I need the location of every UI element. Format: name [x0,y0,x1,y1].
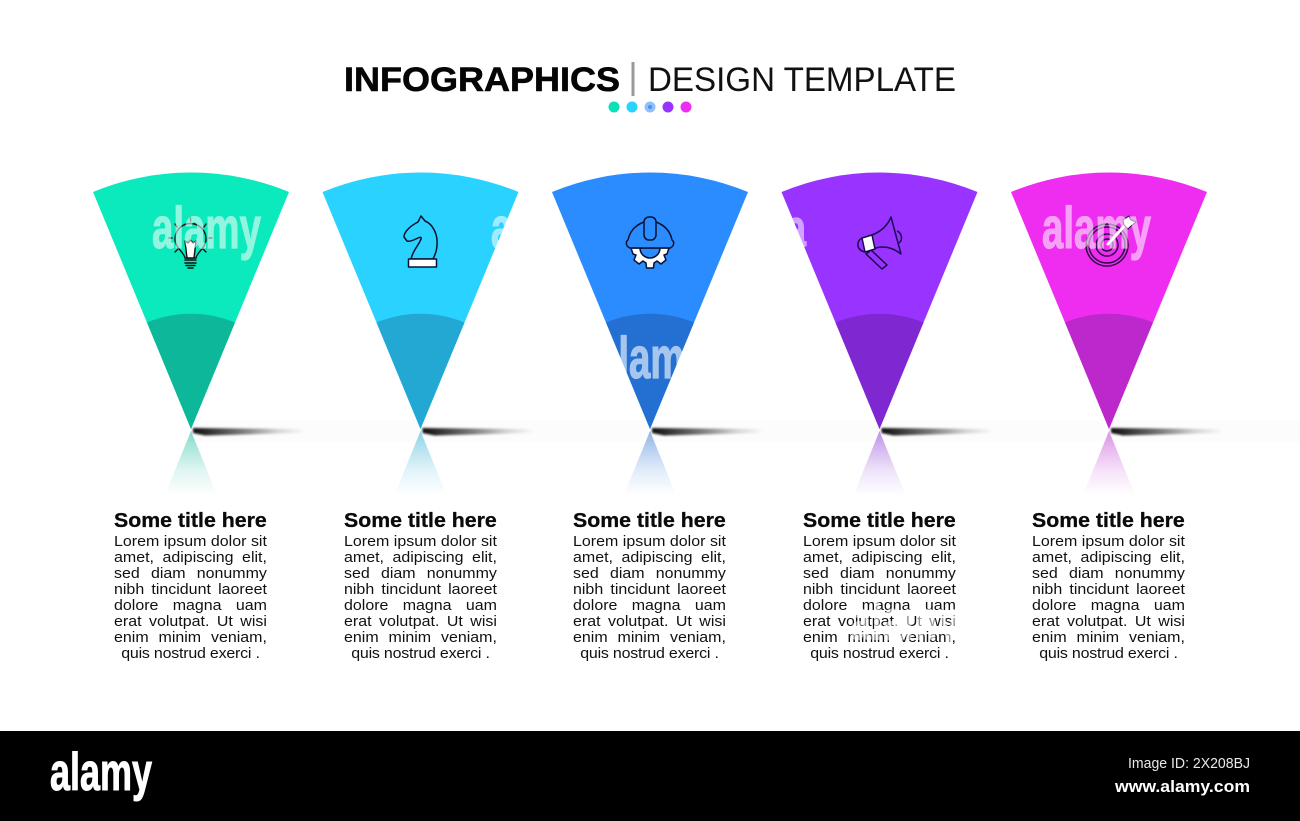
text block: step 4 [802,510,956,662]
text block: step 3: dolore magna uam [573,597,726,614]
watermark: alamy on first cone: alamy [152,196,261,261]
footer logo: alamy [50,743,152,802]
text block: step 2 [344,510,497,662]
text block: step 2: sed diam nonummy [344,565,496,582]
text block: step 1: dolore magna uam [114,597,267,614]
icon: hard hat with gear [626,217,674,268]
text block: step 4: amet, adipiscing elit, [802,549,955,566]
text block: step 2: Lorem ipsum dolor sit [344,533,496,550]
icon: chess knight [404,216,437,267]
text block: step 5: quis nostrud exerci . [1039,645,1178,662]
text block: step 1: amet, adipiscing elit, [114,549,267,566]
text block: step 5: nibh tincidunt laoreet [1032,581,1185,598]
title [344,61,956,99]
text block: step 4: dolore magna uam [802,597,955,614]
text block: step 2: quis nostrud exerci . [351,645,489,662]
icon: light bulb [169,218,212,268]
text block: step 1 [114,510,267,662]
icon: megaphone [858,217,901,269]
text block: step 1: quis nostrud exerci . [121,645,260,662]
text block: step 5: amet, adipiscing elit, [1032,549,1185,566]
text block: step 1: nibh tincidunt laoreet [114,581,267,598]
decorative colour dots [608,102,692,112]
text block: step 5: enim minim veniam, [1032,629,1185,646]
text block: step 2: dolore magna uam [344,597,496,614]
text block: step 1: Some title here [114,510,267,532]
text block: step 4: erat volutpat. Ut wisi [802,613,955,630]
text block: step 1: Lorem ipsum dolor sit [114,533,267,550]
text block: step 3 [573,510,726,662]
text block: step 3: amet, adipiscing elit, [573,549,726,566]
footer bar [0,731,1300,821]
text block: step 2: enim minim veniam, [344,629,496,646]
text block: step 4: quis nostrud exerci . [810,645,948,662]
text block: step 1: erat volutpat. Ut wisi [114,613,267,630]
text block: step 4: sed diam nonummy [802,565,955,582]
text block: step 3: Some title here [573,510,726,532]
text block: step 3: erat volutpat. Ut wisi [573,613,726,630]
text block: step 4: nibh tincidunt laoreet [802,581,955,598]
text block: step 5: erat volutpat. Ut wisi [1032,613,1185,630]
text block: step 2: Some title here [344,510,496,532]
footer website: www.alamy.com [1114,777,1250,796]
text block: step 5 [1032,510,1185,662]
title: INFOGRAPHICS [344,61,620,99]
text block: step 5: dolore magna uam [1032,597,1185,614]
text block: step 3: enim minim veniam, [573,629,726,646]
watermark: alamy letter on second cone edge: a [491,196,512,261]
panel: step 2 cone [322,173,536,495]
faint floor glow [190,420,1300,442]
text block: step 1: sed diam nonummy [114,565,267,582]
text block: step 4: enim minim veniam, [802,629,955,646]
text block: step 3: sed diam nonummy [573,565,726,582]
text block: step 3: nibh tincidunt laoreet [573,581,726,598]
text block: step 4: Lorem ipsum dolor sit [802,533,955,550]
panel: step 1 cone [93,173,306,495]
text block: step 5: Lorem ipsum dolor sit [1032,533,1185,550]
text block: step 3: quis nostrud exerci . [580,645,719,662]
watermark: alamy on third cone tip: alamy [597,326,706,391]
watermark: alamy fragment on fourth cone edge: a [786,200,807,258]
text block: step 1: enim minim veniam, [114,629,267,646]
icon: target with arrow [1086,216,1136,266]
text block: step 2: erat volutpat. Ut wisi [344,613,496,630]
title: DESIGN TEMPLATE [648,61,956,99]
footer image id: Image ID: 2X208BJ [1128,755,1250,772]
panel: step 3 cone [552,173,765,495]
watermark: alamy on fifth cone: alamy [1042,196,1151,261]
text block: step 3: Lorem ipsum dolor sit [573,533,726,550]
text block: step 2: nibh tincidunt laoreet [344,581,496,598]
text block: step 2: amet, adipiscing elit, [344,549,496,566]
panel: step 4 cone [782,173,994,495]
text block: step 5: Some title here [1032,510,1185,532]
watermark: alamy over step 4 text: alamy [850,588,959,653]
text block: step 4: Some title here [802,510,955,532]
panel: step 5 cone [1011,173,1224,495]
text block: step 5: sed diam nonummy [1032,565,1185,582]
